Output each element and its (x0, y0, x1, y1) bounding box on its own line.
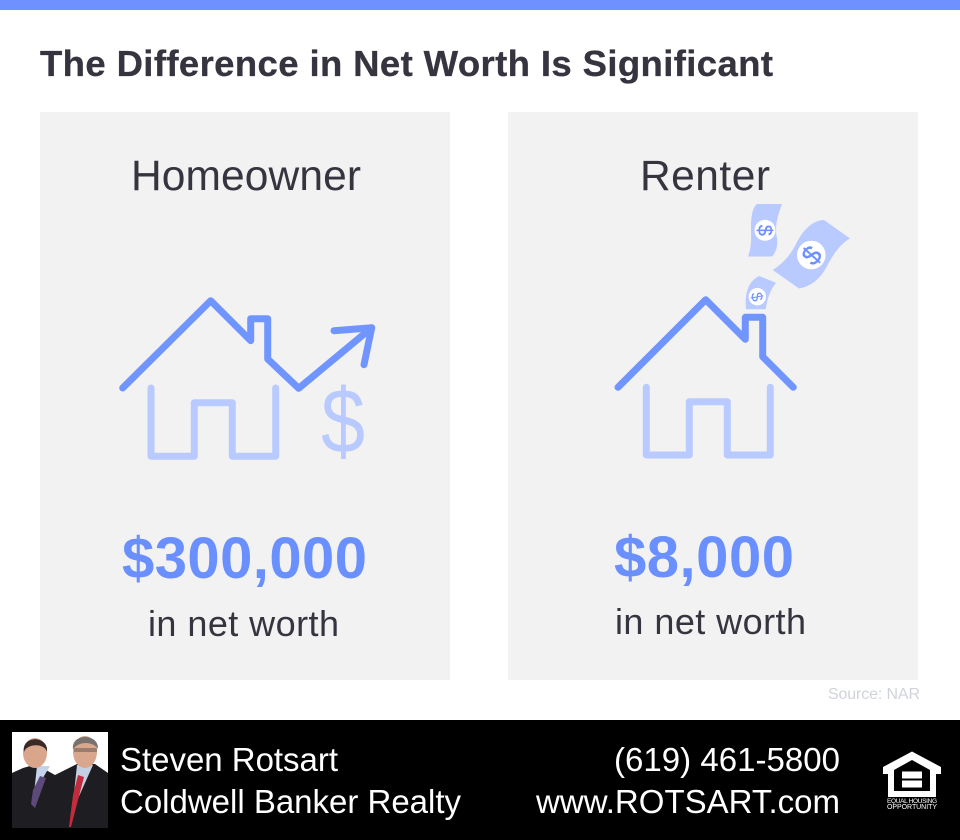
website: www.ROTSART.com (535, 783, 840, 820)
renter heading: Renter (640, 153, 770, 200)
panel: homeowner (40, 112, 450, 680)
icon: house (618, 300, 793, 455)
top accent bar (0, 0, 960, 10)
phone number: (619) 461-5800 (614, 741, 840, 778)
icon: flying money: $ (753, 225, 775, 236)
brokerage name: Coldwell Banker Realty (120, 783, 462, 820)
homeowner value: $300,000 (122, 526, 367, 591)
icon: house with rising arrow (123, 301, 372, 473)
panel: renter (508, 112, 918, 680)
icon: flying money: $ (796, 240, 828, 271)
agent portraits (12, 732, 108, 828)
homeowner heading: Homeowner (131, 153, 361, 200)
renter value: $8,000 (614, 525, 794, 590)
icon: dollar sign: $ (321, 370, 365, 473)
renter caption: in net worth (615, 601, 806, 642)
icon: equal housing opportunity (883, 752, 941, 811)
agent name: Steven Rotsart (120, 741, 338, 778)
source note: Source: NAR (828, 686, 920, 703)
footer band (0, 720, 960, 840)
icon: flying money: $ (747, 291, 765, 303)
homeowner caption: in net worth (148, 603, 339, 644)
icon: flying money (746, 204, 850, 309)
icon: equal housing opportunity: OPPORTUNITY (887, 804, 937, 811)
icon: equal housing opportunity: EQUAL HOUSING (887, 798, 937, 805)
title: The Difference in Net Worth Is Significant (40, 43, 773, 84)
